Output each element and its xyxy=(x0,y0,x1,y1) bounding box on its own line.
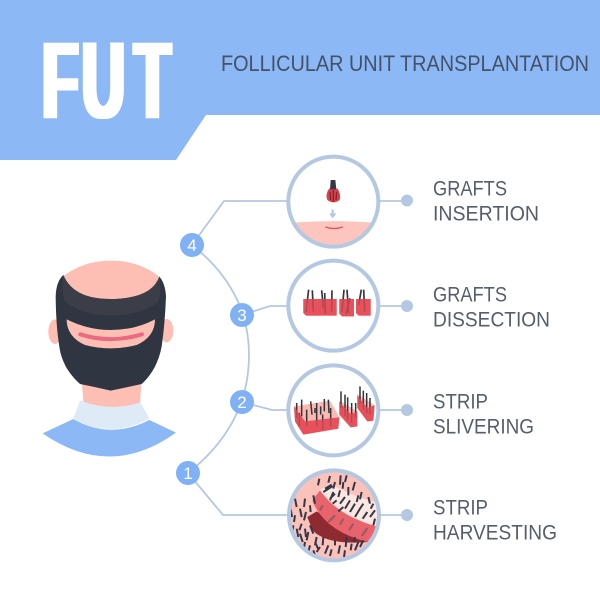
step 4 node xyxy=(180,233,204,257)
step 2 node: 2 xyxy=(237,393,247,412)
neck xyxy=(82,380,142,407)
graft xyxy=(326,189,340,202)
hairs xyxy=(306,290,365,314)
label: strip harvesting xyxy=(433,496,557,544)
lifted strip xyxy=(312,490,378,542)
wound xyxy=(307,511,368,543)
hair xyxy=(56,275,166,391)
bald scalp xyxy=(63,261,160,303)
circle: grafts dissection xyxy=(288,261,378,351)
circle: strip slivering xyxy=(288,365,378,455)
skin xyxy=(296,221,371,245)
shoulders xyxy=(43,419,176,456)
illustration: back of head xyxy=(43,261,176,456)
tissue overlay xyxy=(294,395,375,435)
label: strip slivering: SLIVERING xyxy=(433,414,534,438)
follicles xyxy=(320,505,367,536)
ears xyxy=(48,319,173,344)
label: grafts insertion xyxy=(433,176,539,226)
tissue base xyxy=(303,299,371,316)
hairs xyxy=(291,475,375,557)
title: FUT: FUT xyxy=(42,19,171,142)
tissue overlay xyxy=(303,299,371,316)
step 4 node: 4 xyxy=(187,236,197,255)
top faces xyxy=(294,401,339,421)
end dots xyxy=(401,194,413,521)
circle: strip harvesting xyxy=(289,470,383,560)
pale excision edge xyxy=(320,484,377,526)
label: strip slivering: STRIP xyxy=(433,390,488,414)
label: strip slivering xyxy=(433,390,534,438)
tissue base xyxy=(294,395,375,435)
label: strip harvesting: STRIP xyxy=(433,496,488,520)
incision mark xyxy=(325,227,343,228)
label: grafts insertion: GRAFTS xyxy=(433,176,507,200)
step 2 node xyxy=(230,390,254,414)
connector lines xyxy=(188,201,407,515)
label: grafts insertion: INSERTION xyxy=(433,202,539,226)
incision xyxy=(80,334,142,339)
header banner xyxy=(0,0,600,160)
label: grafts dissection: DISSECTION xyxy=(433,308,550,332)
step 3 node xyxy=(230,303,254,327)
step 1 node: 1 xyxy=(183,464,193,483)
step 1 node xyxy=(176,461,200,485)
harvested strip xyxy=(67,319,155,348)
step 3 node: 3 xyxy=(237,306,247,325)
circle: grafts insertion xyxy=(286,154,380,249)
label: grafts dissection xyxy=(433,282,550,332)
hair highlight xyxy=(62,275,160,315)
collar xyxy=(73,401,149,429)
label: grafts dissection: GRAFTS xyxy=(433,282,507,306)
arrow xyxy=(330,209,335,217)
label: strip harvesting: HARVESTING xyxy=(433,520,557,544)
hairs xyxy=(297,386,370,430)
